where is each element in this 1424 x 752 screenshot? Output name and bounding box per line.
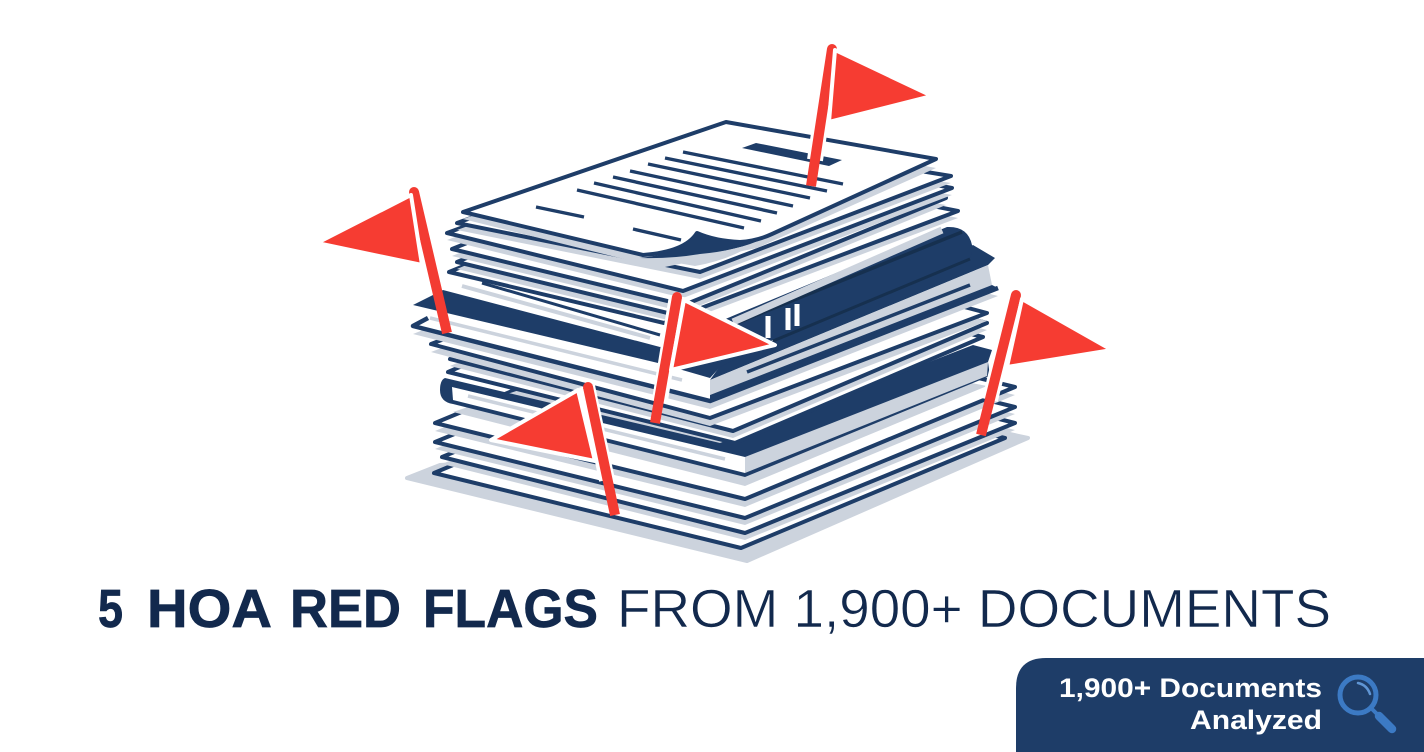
- title: RED: [290, 579, 401, 639]
- badge text: [1059, 673, 1322, 735]
- badge: [1016, 658, 1424, 752]
- upper book: [413, 200, 998, 401]
- middle sheets: [413, 220, 998, 443]
- flag: middle: [655, 292, 775, 423]
- body lines: [536, 152, 843, 240]
- flag: left: [317, 187, 447, 333]
- illustration: document stack: [407, 122, 1028, 561]
- title: FROM 1,900+ DOCUMENTS: [617, 579, 1331, 639]
- badge text: 1,900+ Documents: [1059, 673, 1322, 703]
- title: [98, 579, 1331, 639]
- flag: front: [491, 382, 615, 515]
- flag: top: [811, 44, 932, 186]
- flag: right: [981, 290, 1112, 435]
- badge text: Analyzed: [1190, 705, 1322, 735]
- ground shadow: [407, 433, 1028, 561]
- lower sheets: [434, 311, 1015, 548]
- lower book: [440, 345, 992, 477]
- top sheet with text lines: [463, 122, 936, 266]
- curled corner: [640, 232, 772, 258]
- heading bar: [742, 143, 842, 166]
- title: HOA: [147, 579, 272, 639]
- spine marks: [768, 304, 797, 338]
- title: 5: [98, 579, 123, 639]
- title: FLAGS: [423, 579, 598, 639]
- icon: magnifying glass: [1340, 677, 1392, 729]
- upper sheets: [447, 129, 958, 323]
